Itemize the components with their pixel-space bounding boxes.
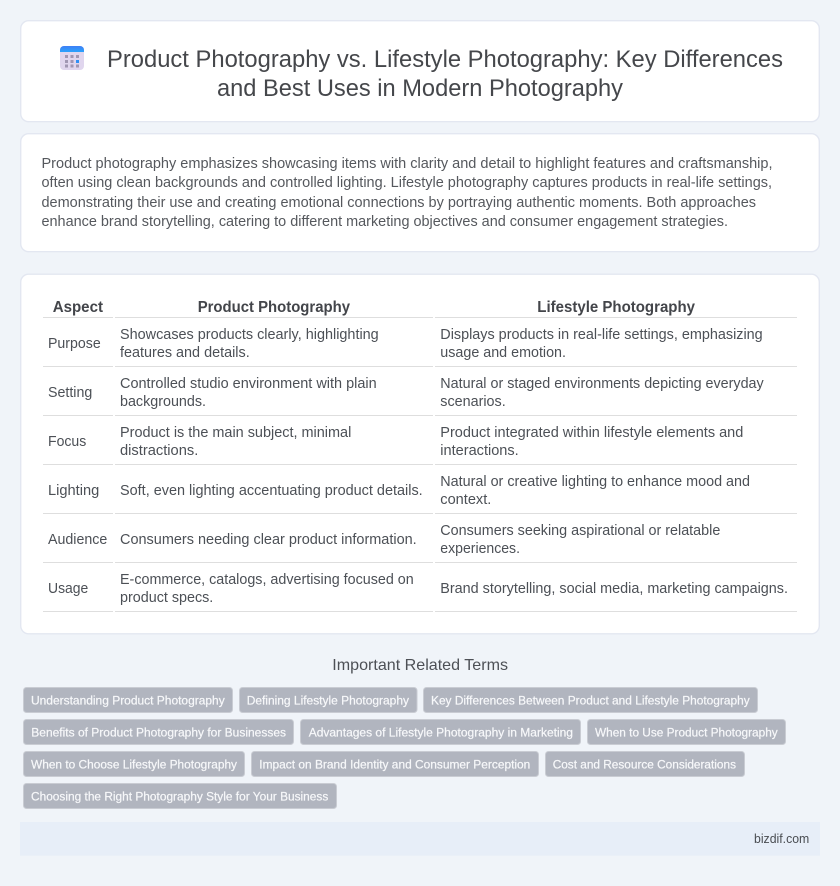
row: purpose: features and details. — [120, 345, 250, 361]
row: focus: Focus — [48, 434, 86, 450]
tag: understanding product photography: Understanding Product Photography — [31, 694, 225, 708]
tag: choosing the right style — [24, 784, 336, 808]
row: purpose — [48, 327, 763, 361]
footer bar — [20, 822, 820, 856]
related term tags — [24, 688, 786, 808]
panel: introduction — [21, 134, 819, 252]
row: focus: Product is the main subject, minimal — [120, 425, 351, 441]
row: usage — [48, 572, 788, 606]
heading: important related terms: Important Related Terms — [332, 657, 508, 674]
row: setting: scenarios. — [440, 394, 506, 410]
tag: impact on brand identity: Impact on Brand Identity and Consumer Perception — [259, 758, 530, 772]
tag: benefits: Benefits of Product Photography for Businesses — [31, 726, 286, 740]
tag: choosing the right style: Choosing the Right Photography Style for Your Business — [31, 790, 328, 804]
tag: when to choose lifestyle photography — [24, 752, 244, 776]
tag: when to use product photography — [588, 720, 786, 744]
tag: advantages: Advantages of Lifestyle Photography in Marketing — [309, 726, 573, 740]
row: lighting: context. — [440, 492, 491, 508]
title: Product Photography vs. Lifestyle Photography: Key Differences — [107, 46, 783, 73]
tag: when to choose lifestyle photography: When to Choose Lifestyle Photography — [31, 758, 238, 772]
row: audience: Consumers seeking aspirational or relatable — [440, 523, 720, 539]
row: purpose: Purpose — [48, 336, 101, 352]
tag: impact on brand identity — [252, 752, 538, 776]
row: focus — [48, 425, 743, 459]
row: setting: Natural or staged environments depicting everyday — [440, 376, 764, 392]
row: usage: Brand storytelling, social media, marketing campaigns. — [440, 581, 788, 597]
tag: cost and resource — [546, 752, 744, 776]
row: lighting: Lighting — [48, 483, 99, 499]
intro paragraph: Product photography emphasizes showcasing items with clarity and detail to highlight features and craftsmanship, — [42, 156, 772, 172]
tag: key differences — [424, 688, 758, 712]
tag: key differences: Key Differences Between Product and Lifestyle Photography — [431, 694, 750, 708]
tag: when to use product photography: When to Use Product Photography — [595, 726, 778, 740]
row: focus: Product integrated within lifestyle elements and — [440, 425, 743, 441]
intro paragraph: often using clean backgrounds and controlled lighting. Lifestyle photography captures products in real-life settings, — [42, 175, 772, 191]
row: focus: distractions. — [120, 443, 198, 459]
intro paragraph: demonstrating their use and creating emotional connections by portraying authentic moments. Both approaches — [42, 195, 756, 211]
row: usage: product specs. — [120, 590, 213, 606]
title: and Best Uses in Modern Photography — [217, 75, 624, 102]
row: lighting: Natural or creative lighting to enhance mood and — [440, 474, 750, 490]
row: audience: experiences. — [440, 541, 520, 557]
panel: comparison table — [21, 274, 819, 634]
row: setting: backgrounds. — [120, 394, 206, 410]
tag: understanding product photography — [24, 688, 232, 712]
title — [107, 46, 783, 102]
row: setting: Setting — [48, 385, 92, 401]
table header — [53, 299, 695, 316]
table header: Aspect — [53, 299, 103, 316]
icon: calendar — [60, 46, 84, 70]
intro paragraph — [42, 156, 772, 230]
row: lighting: Soft, even lighting accentuating product details. — [120, 483, 423, 499]
panel: title card — [21, 21, 819, 122]
row: audience: Consumers needing clear product information. — [120, 532, 417, 548]
tag: defining lifestyle photography: Defining Lifestyle Photography — [247, 694, 410, 708]
row: purpose: Displays products in real-life settings, emphasizing — [440, 327, 763, 343]
row: usage: Usage — [48, 581, 88, 597]
row: purpose: usage and emotion. — [440, 345, 566, 361]
row: lighting — [48, 474, 750, 508]
tag: benefits — [24, 720, 294, 744]
row: audience: Audience — [48, 532, 107, 548]
table header: Product Photography — [198, 299, 350, 316]
intro paragraph: enhance brand storytelling, catering to different marketing objectives and consumer engagement strategies. — [42, 214, 728, 230]
table header: Lifestyle Photography — [537, 299, 695, 316]
row: usage: E-commerce, catalogs, advertising focused on — [120, 572, 414, 588]
row: setting: Controlled studio environment with plain — [120, 376, 377, 392]
tag: defining lifestyle photography — [240, 688, 417, 712]
footer bar: bizdif.com — [754, 832, 809, 846]
row: focus: interactions. — [440, 443, 519, 459]
row: purpose: Showcases products clearly, highlighting — [120, 327, 379, 343]
tag: advantages — [300, 720, 580, 744]
row: setting — [48, 376, 764, 410]
row: audience — [48, 523, 720, 557]
tag: cost and resource: Cost and Resource Considerations — [553, 758, 736, 772]
